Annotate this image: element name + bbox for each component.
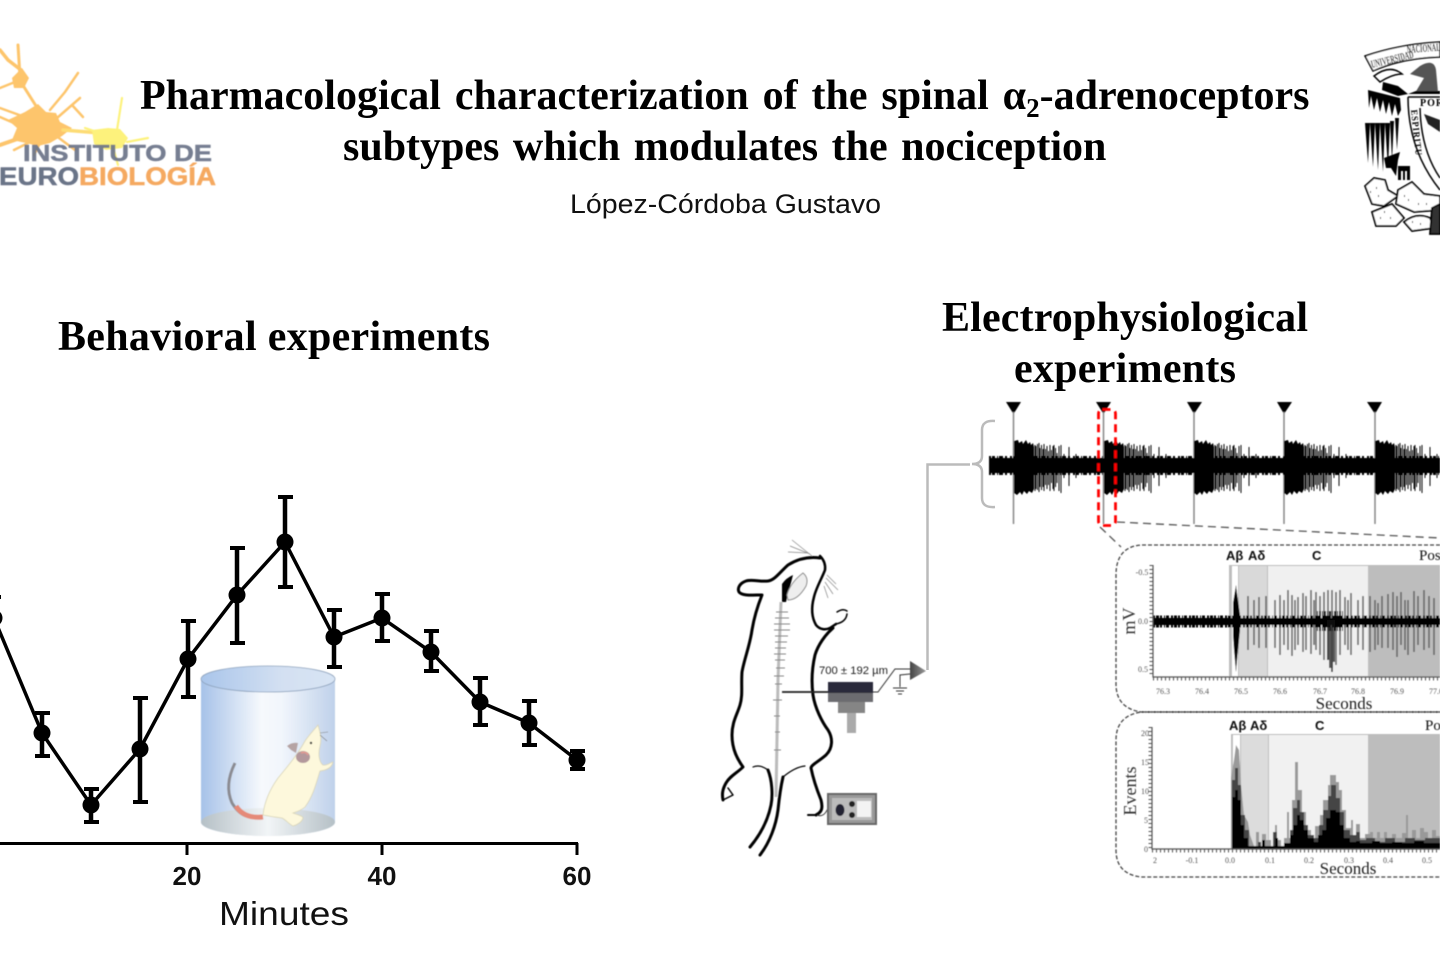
histogram outer layer xyxy=(1231,745,1440,849)
title line 1: 2 xyxy=(1026,93,1040,123)
x tick labels: 76.8 xyxy=(1351,687,1365,696)
data line xyxy=(0,542,577,805)
heading: behavioral experiments: Behavioral experiments xyxy=(58,314,490,360)
connector: amplifier to trace xyxy=(928,464,970,670)
logo text line 1: INSTITUTO DE xyxy=(23,140,212,166)
y tick labels: 15 xyxy=(1141,758,1149,767)
x tick labels: 0.3 xyxy=(1344,856,1354,865)
distance label: 700 ± 192 µm xyxy=(819,665,888,677)
histogram middle layer xyxy=(1232,768,1440,849)
stimulator xyxy=(817,794,876,824)
rat outline xyxy=(722,556,847,855)
phase labels: C xyxy=(1315,718,1325,733)
x tick labels: -0.1 xyxy=(1186,856,1198,865)
phase labels: C xyxy=(1312,548,1322,563)
x tick labels: 0.1 xyxy=(1265,856,1275,865)
panel frame xyxy=(1116,712,1440,877)
baseline activity xyxy=(989,458,1440,473)
rat eye xyxy=(310,742,312,744)
amplifier xyxy=(873,661,926,694)
panel: raw recording xyxy=(1116,545,1440,713)
axis minor ticks xyxy=(1151,565,1440,679)
rat spinal cord xyxy=(773,602,790,797)
evoked response xyxy=(1233,585,1344,672)
x axis title: Seconds xyxy=(1316,694,1372,713)
phase labels: Aδ xyxy=(1250,718,1267,733)
axes xyxy=(1152,727,1440,849)
rat tail xyxy=(229,763,246,816)
author: López-Córdoba Gustavo xyxy=(570,189,881,219)
title line 2: subtypes which modulates the nociception xyxy=(343,124,1106,170)
electrophysiology trace xyxy=(989,402,1440,547)
logo: Instituto de Neurobiología xyxy=(0,45,216,191)
eagle xyxy=(1365,63,1440,180)
electrode wire xyxy=(782,691,828,693)
evoked spikes xyxy=(1035,443,1437,493)
y tick labels: 0.0 xyxy=(1138,617,1148,626)
y tick labels xyxy=(1136,568,1148,674)
x axis title: Minutes xyxy=(219,895,349,932)
phase shading xyxy=(1229,565,1440,677)
icon: rat in cylinder xyxy=(201,666,335,836)
x tick labels: 76.4 xyxy=(1195,687,1209,696)
x tick labels: 2 xyxy=(1153,856,1157,865)
x tick labels xyxy=(1153,856,1432,865)
rat brain xyxy=(782,573,807,602)
zoom guides xyxy=(1100,522,1440,547)
phase labels xyxy=(1226,548,1322,563)
crest cactus xyxy=(1365,178,1440,234)
axis minor ticks xyxy=(1150,727,1440,851)
line chart: behavioral time course xyxy=(0,497,591,932)
stimulus markers xyxy=(1006,402,1382,414)
x axis xyxy=(0,843,578,855)
x tick labels: 0.4 xyxy=(1383,856,1393,865)
x tick labels: 76.9 xyxy=(1390,687,1404,696)
y axis title: mV xyxy=(1119,607,1139,634)
crest banner: UNIVERSIDAD xyxy=(1370,48,1415,70)
y tick labels: -0.5 xyxy=(1136,568,1148,577)
x tick labels: 0.0 xyxy=(1225,856,1235,865)
x tick labels: 76.6 xyxy=(1273,687,1287,696)
rat body xyxy=(263,725,333,826)
rat whiskers xyxy=(320,732,328,741)
x tick labels: 76.7 xyxy=(1313,687,1327,696)
x tick labels: 0.2 xyxy=(1304,856,1314,865)
phase labels: Aβ xyxy=(1229,718,1246,733)
x axis labels: 40 xyxy=(368,861,396,891)
crest banner: NACIONAL xyxy=(1406,41,1440,55)
y tick labels: 0.5 xyxy=(1138,665,1148,674)
x axis title: Seconds xyxy=(1320,859,1376,878)
heading: electrophysiological experiments xyxy=(942,295,1308,392)
y tick labels xyxy=(1141,729,1149,854)
cylinder floor xyxy=(201,808,335,836)
logo text line 2: EURO BIOLOGÍA xyxy=(0,162,216,191)
crest banner xyxy=(1365,41,1440,71)
crest shield: ESPIRITU xyxy=(1409,109,1424,156)
heading line 1: Electrophysiological xyxy=(942,295,1308,341)
title xyxy=(140,73,1309,170)
x axis labels: 20 xyxy=(173,861,201,891)
evoked bursts xyxy=(1014,440,1395,495)
heading line 2: experiments xyxy=(1014,346,1236,392)
phase labels xyxy=(1229,718,1325,733)
x axis labels xyxy=(173,861,591,891)
x tick labels xyxy=(1156,687,1440,696)
y tick labels: 10 xyxy=(1141,787,1149,796)
logo: UNAM crest xyxy=(1365,41,1440,234)
neuron illustration xyxy=(0,45,148,165)
phase labels: Aβ xyxy=(1226,548,1243,563)
rat ear xyxy=(287,743,298,753)
x axis labels: 60 xyxy=(563,861,591,891)
title line 1: Pharmacological characterization of the spinal α xyxy=(140,73,1026,119)
data markers xyxy=(0,534,586,814)
rat whiskers xyxy=(788,540,838,598)
phase shading xyxy=(1231,734,1440,849)
y tick labels: 5 xyxy=(1144,816,1148,825)
cylinder top xyxy=(201,666,335,692)
x tick labels: 0.5 xyxy=(1422,856,1432,865)
x tick labels: 76.3 xyxy=(1156,687,1170,696)
stimulus artefact lines xyxy=(1014,412,1375,524)
spikes xyxy=(1248,590,1434,668)
manipulator xyxy=(828,682,873,733)
y tick labels: 20 xyxy=(1141,729,1149,738)
title line 1: -adrenoceptors xyxy=(1040,73,1309,119)
phase labels: Aδ xyxy=(1248,548,1265,563)
bracket xyxy=(972,421,995,507)
illustration: rat with spinal recording xyxy=(722,540,926,855)
crest shield xyxy=(1408,97,1440,190)
histogram inner layer xyxy=(1232,790,1440,849)
selection box xyxy=(1098,410,1116,526)
y axis title: Events xyxy=(1120,766,1140,816)
y tick labels: 0 xyxy=(1144,845,1148,854)
axes xyxy=(1153,565,1440,677)
error bar caps xyxy=(0,497,585,822)
trace baseline xyxy=(1153,618,1440,625)
panel: peristimulus histogram xyxy=(1116,712,1440,878)
panel frame xyxy=(1116,545,1440,712)
error bars xyxy=(0,497,577,822)
x tick labels: 76.5 xyxy=(1234,687,1248,696)
cylinder body xyxy=(201,679,335,836)
